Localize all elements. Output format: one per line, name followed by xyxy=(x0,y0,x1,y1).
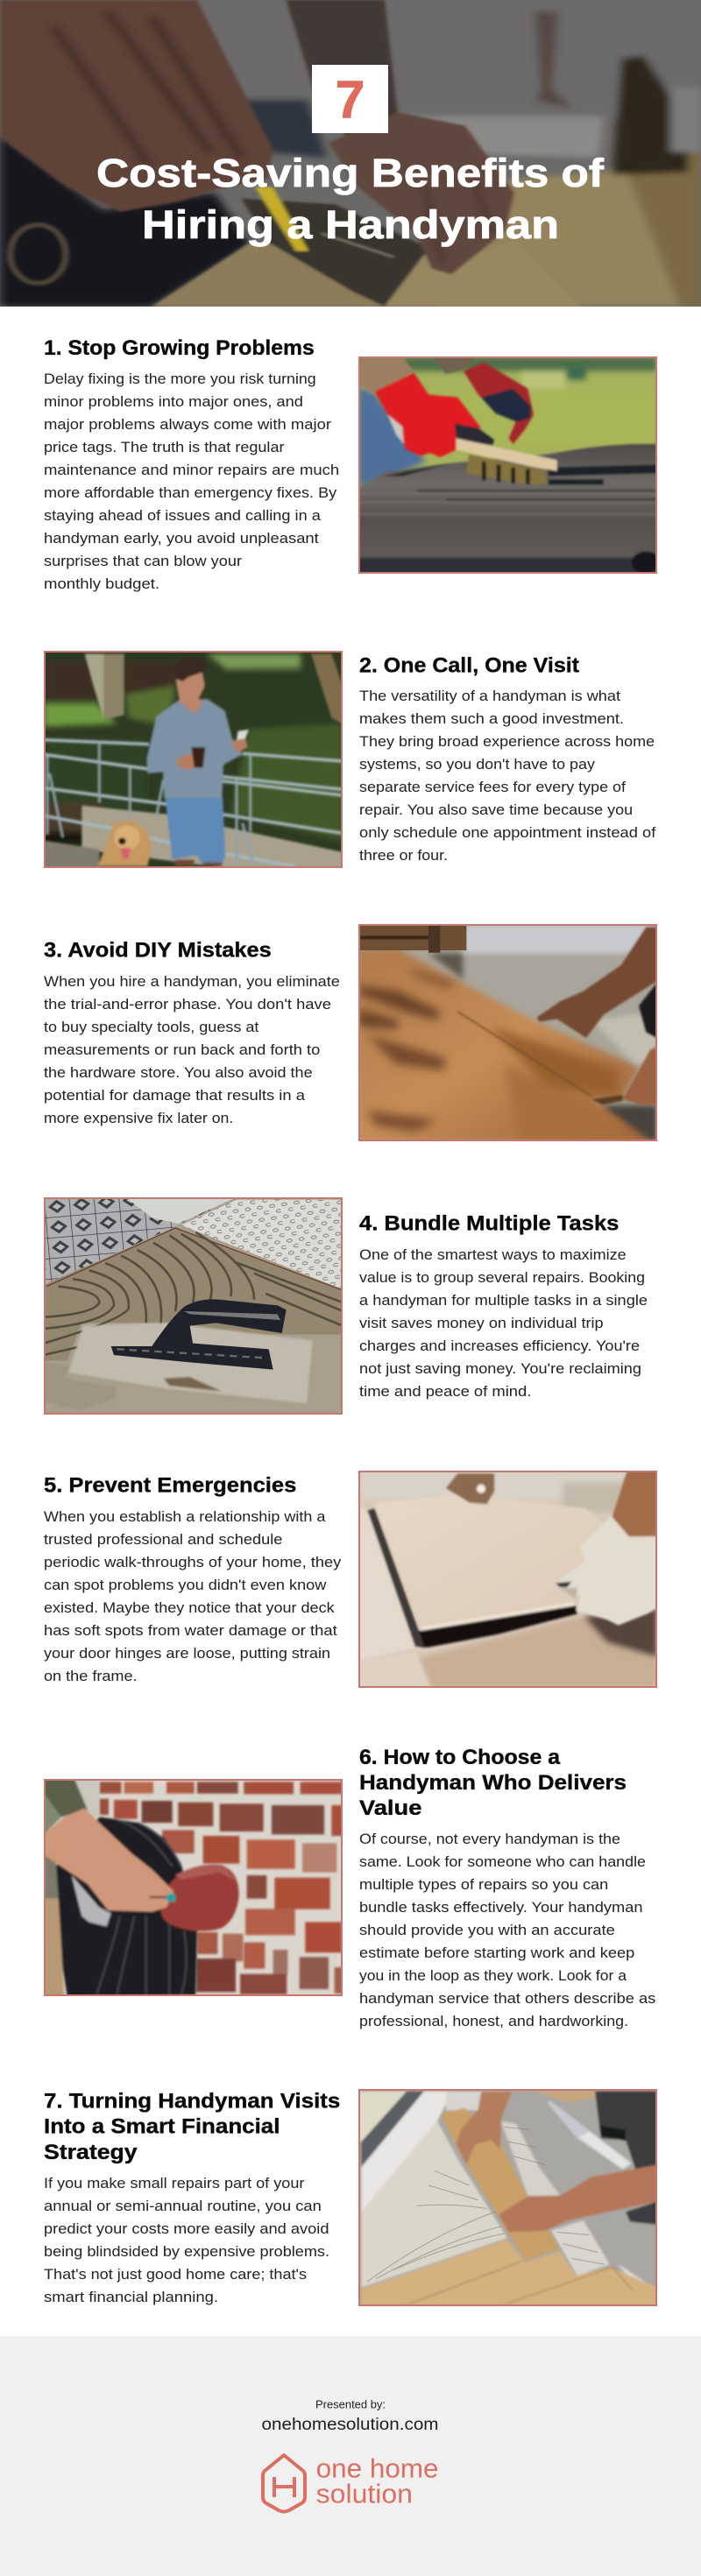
photo: wire brush on grill xyxy=(360,358,655,572)
body text: If you make small repairs part of your xyxy=(44,2176,305,2191)
body text xyxy=(359,1247,648,1400)
body text: One of the smartest ways to maximize xyxy=(359,1247,627,1263)
panel: 6. How to Choose a Handyman Who Delivers Value xyxy=(44,1746,655,2029)
title: Cost-Saving Benefits of xyxy=(96,151,605,195)
body text xyxy=(44,974,340,1126)
body text: your door hinges are loose, putting strain xyxy=(44,1646,330,1662)
heading xyxy=(44,2090,340,2164)
body text: makes them such a good investment. xyxy=(359,711,624,727)
body text: visit saves money on individual trip xyxy=(359,1316,604,1331)
body text: existed. Maybe they notice that your deck xyxy=(44,1600,335,1616)
heading: 3. Avoid DIY Mistakes xyxy=(44,939,272,962)
body text: multiple types of repairs so you can xyxy=(359,1877,608,1893)
body text: periodic walk-throughs of your home, they xyxy=(44,1555,342,1570)
photo: hose reel on brick wall xyxy=(46,1781,341,1994)
presented by label: Presented by: xyxy=(315,2398,386,2410)
heading: 1. Stop Growing Problems xyxy=(44,336,315,360)
body text: smart financial planning. xyxy=(44,2290,218,2305)
heading xyxy=(359,1746,627,1820)
photo: notched trowel on tile adhesive xyxy=(46,1199,341,1413)
body text: can spot problems you didn't even know xyxy=(44,1577,326,1593)
body text: being blindsided by expensive problems. xyxy=(44,2244,329,2260)
logo wordmark: one home xyxy=(316,2452,438,2484)
photo frame xyxy=(359,357,656,573)
body text: the hardware store. You also avoid the xyxy=(44,1065,313,1081)
body text: the trial-and-error phase. You don't have xyxy=(44,997,331,1013)
body text: That's not just good home care; that's xyxy=(44,2267,307,2283)
footer panel xyxy=(0,2336,701,2576)
body text: handyman early, you avoid unpleasant xyxy=(44,531,319,547)
hero banner xyxy=(0,0,701,307)
title xyxy=(96,151,605,247)
body text: you in the loop as they work. Look for a xyxy=(359,1968,627,1984)
body text: price tags. The truth is that regular xyxy=(44,440,285,455)
body text: The versatility of a handyman is what xyxy=(359,688,620,704)
logo wordmark: solution xyxy=(316,2479,413,2509)
heading: 4. Bundle Multiple Tasks xyxy=(359,1212,619,1235)
hero photo: hands marking wood xyxy=(0,0,701,307)
panel: 5. Prevent Emergencies xyxy=(44,1471,657,1688)
photo: gloved hands placing tile xyxy=(360,1472,655,1686)
body text: monthly budget. xyxy=(44,576,159,592)
body text: major problems always come with major xyxy=(44,417,332,433)
photo: laying wood planks xyxy=(360,926,655,1140)
body text: trusted professional and schedule xyxy=(44,1532,282,1548)
body text xyxy=(44,371,339,592)
heading: Handyman Who Delivers xyxy=(359,1771,627,1795)
number box xyxy=(312,65,388,133)
panel: 7. Turning Handyman Visits Into a Smart Financial Strategy xyxy=(44,2089,657,2306)
body text: three or four. xyxy=(359,848,448,864)
body text: annual or semi-annual routine, you can xyxy=(44,2198,322,2214)
body text: same. Look for someone who can handle xyxy=(359,1854,646,1870)
body text: staying ahead of issues and calling in a xyxy=(44,508,322,524)
body text: time and peace of mind. xyxy=(359,1384,531,1400)
photo frame xyxy=(359,1471,656,1687)
heading: 6. How to Choose a xyxy=(359,1746,561,1769)
body text: minor problems into major ones, and xyxy=(44,394,303,410)
body text: potential for damage that results in a xyxy=(44,1088,306,1104)
body text: bundle tasks effectively. Your handyman xyxy=(359,1900,643,1916)
photo frame xyxy=(45,1780,342,1995)
body text: handyman service that others describe as xyxy=(359,1991,655,2007)
panel: 1. Stop Growing Problems xyxy=(44,336,661,592)
body text xyxy=(44,2176,329,2305)
heading: Into a Smart Financial xyxy=(44,2114,280,2139)
body text: They bring broad experience across home xyxy=(359,734,655,750)
body text: When you hire a handyman, you eliminate xyxy=(44,974,340,990)
body text: Delay fixing is the more you risk turning xyxy=(44,371,316,387)
body text xyxy=(359,1831,655,2029)
body text: estimate before starting work and keep xyxy=(359,1945,634,1961)
body text: more affordable than emergency fixes. By xyxy=(44,485,337,501)
heading: 2. One Call, One Visit xyxy=(359,653,579,678)
heading: 5. Prevent Emergencies xyxy=(44,1473,296,1498)
body text: a handyman for multiple tasks in a single xyxy=(359,1293,648,1309)
body text: has soft spots from water damage or that xyxy=(44,1623,337,1639)
photo frame xyxy=(359,2090,656,2305)
grey patterned tile xyxy=(44,1197,237,1285)
body text: value is to group several repairs. Booking xyxy=(359,1270,645,1286)
body text: on the frame. xyxy=(44,1669,138,1684)
photo frame xyxy=(45,652,342,867)
heading: 7. Turning Handyman Visits xyxy=(44,2090,340,2113)
photo frame xyxy=(359,925,656,1140)
photo: installing oak flooring xyxy=(360,2091,655,2304)
body text: Of course, not every handyman is the xyxy=(359,1831,620,1847)
body text: maintenance and minor repairs are much xyxy=(44,462,339,478)
body text: predict your costs more easily and avoid xyxy=(44,2221,329,2237)
body text: separate service fees for every type of xyxy=(359,780,626,795)
body text: professional, honest, and hardworking. xyxy=(359,2014,628,2029)
body text: systems, so you don't have to pay xyxy=(359,757,596,773)
heading: Value xyxy=(359,1796,421,1820)
body text: to buy specialty tools, guess at xyxy=(44,1020,259,1035)
body text: only schedule one appointment instead of xyxy=(359,825,656,841)
body text: not just saving money. You're reclaiming xyxy=(359,1361,641,1377)
body text: repair. You also save time because you xyxy=(359,802,633,818)
icon: house with H xyxy=(263,2455,305,2512)
body text: measurements or run back and forth to xyxy=(44,1042,320,1058)
panel: 4. Bundle Multiple Tasks xyxy=(44,1197,648,1415)
body text: charges and increases efficiency. You're xyxy=(359,1338,640,1354)
panel: 2. One Call, One Visit xyxy=(44,651,656,868)
body text xyxy=(44,1509,342,1684)
website: onehomesolution.com xyxy=(261,2416,438,2434)
photo: man with phone and dog xyxy=(46,653,341,866)
body text: should provide you with an accurate xyxy=(359,1923,615,1938)
logo xyxy=(263,2452,438,2512)
number 7: 7 xyxy=(336,70,365,129)
photo frame xyxy=(45,1198,342,1414)
logo wordmark xyxy=(316,2452,438,2509)
panel: 3. Avoid DIY Mistakes xyxy=(44,924,657,1141)
body text: more expensive fix later on. xyxy=(44,1111,233,1126)
body text: When you establish a relationship with a xyxy=(44,1509,326,1525)
body text: surprises that can blow your xyxy=(44,554,243,569)
title: Hiring a Handyman xyxy=(142,202,559,247)
heading: Strategy xyxy=(44,2141,138,2164)
body text xyxy=(359,688,656,864)
